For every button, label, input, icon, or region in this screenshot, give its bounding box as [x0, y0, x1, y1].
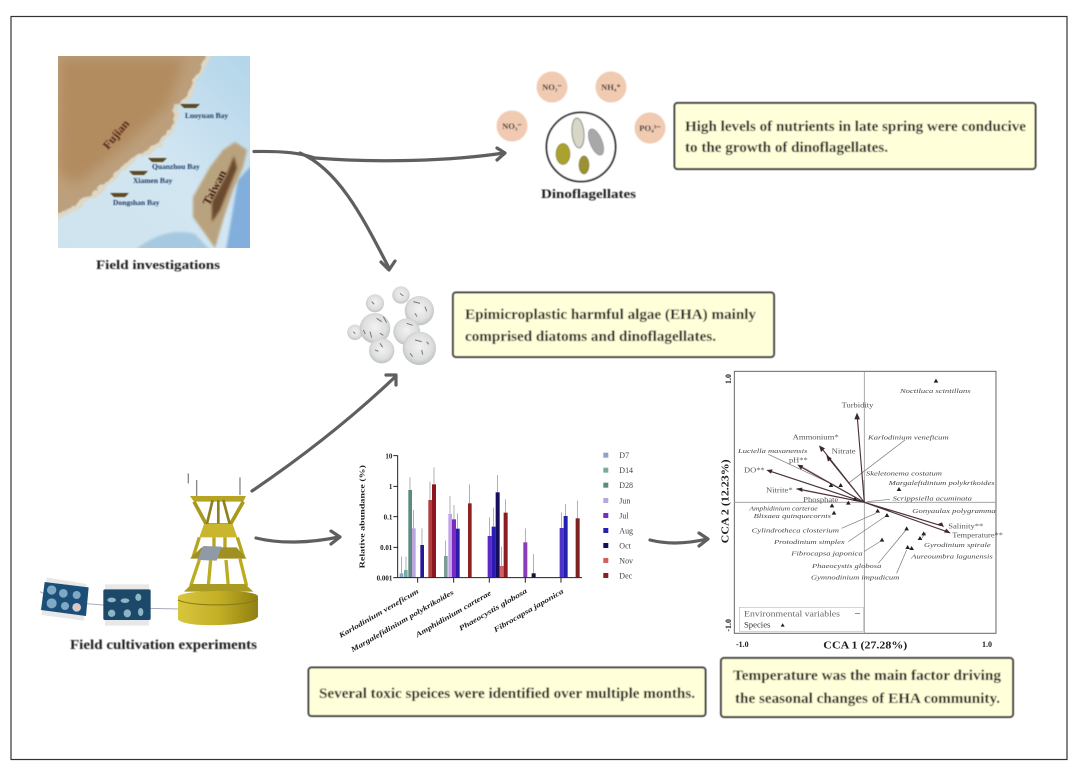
- nutrient: NO3: [496, 110, 528, 142]
- species labels: Protodinium simplex: [773, 539, 845, 546]
- environmental labels: [744, 402, 1004, 540]
- bars: [400, 484, 580, 577]
- species labels: Phaeocystis globosa: [811, 563, 882, 570]
- axis labels: CCA 2 (12.23%): [721, 459, 732, 543]
- species labels: Margalefidinium polykrikoides: [887, 480, 995, 487]
- icon: cultivation plates and buoy: [40, 473, 258, 626]
- arrow: map to microplastics: [300, 153, 395, 270]
- legend: Aug: [619, 526, 633, 535]
- axis labels: -1.0: [724, 619, 733, 632]
- legend: Jun: [619, 496, 630, 505]
- marker: Quanzhou Bay: [148, 158, 200, 171]
- panel: dinoflagellates nutrients: [496, 72, 666, 201]
- arrow: buoy to bar chart: [256, 531, 340, 544]
- species labels: Phaeocystis globosa: [457, 586, 529, 633]
- callout: nutrients: [674, 103, 1036, 169]
- legend: Jul: [619, 511, 629, 520]
- species labels: Skeletonema costatum: [866, 470, 942, 477]
- legend: [603, 451, 633, 580]
- plate one: [41, 577, 89, 621]
- y axis labels: 0.1: [384, 513, 393, 521]
- error bars: [402, 467, 577, 573]
- species labels: Fibrocapsa japonica: [492, 586, 565, 634]
- species labels: Luciella masanensis: [737, 448, 808, 455]
- species labels: Gyrodinium spirale: [924, 542, 991, 549]
- y axis labels: 0.001: [377, 574, 393, 582]
- axis labels: 1.0: [982, 640, 992, 649]
- species leader lines: [768, 440, 926, 573]
- panel: field investigations map: [50, 50, 252, 250]
- marker: Luoyuan Bay: Luoyuan Bay: [185, 111, 228, 120]
- environmental labels: DO**: [744, 467, 765, 475]
- legend: D28: [619, 481, 633, 490]
- arrow: bar chart to CCA plot: [650, 533, 708, 546]
- y axis labels: 1: [389, 483, 393, 491]
- legend: D14: [619, 466, 633, 475]
- environmental labels: Temperature**: [952, 532, 1004, 540]
- marker: Dongshan Bay: [110, 193, 160, 207]
- environmental labels: Ammonium*: [793, 434, 839, 442]
- species labels: Karlodinium veneficum: [336, 586, 420, 640]
- environmental labels: Phosphate: [803, 496, 838, 504]
- species labels: [336, 586, 565, 655]
- axis labels: CCA 1 (27.28%): [823, 640, 907, 651]
- species labels: Margalefidinium polykrikoides: [348, 588, 455, 655]
- icon: microplastic spheres: [347, 286, 436, 365]
- legend: Nov: [619, 556, 633, 565]
- heading: Dinoflagellates: Dinoflagellates: [541, 186, 636, 201]
- callout: EHA composition: comprised diatoms and dinoflagellates.: [465, 329, 716, 345]
- species labels: Karlodinium veneficum: [867, 434, 949, 441]
- marker: Quanzhou Bay: Quanzhou Bay: [152, 162, 200, 171]
- axes: [393, 455, 582, 583]
- heading: Field investigations: Field investigations: [96, 257, 220, 272]
- species labels: Noctiluca scintillans: [899, 388, 971, 395]
- y axis labels: 0.01: [380, 544, 393, 552]
- species triangles: [829, 379, 938, 550]
- arrow: buoy to microplastics: [252, 375, 396, 491]
- callout: toxic species: Several toxic speices were identified over multiple months.: [319, 686, 695, 702]
- species labels: Aureoumbra lagunensis: [910, 553, 993, 560]
- marker: Luoyuan Bay: [180, 104, 228, 120]
- bar chart: relative abundance: [336, 451, 633, 655]
- callout: temperature: the seasonal changes of EHA community.: [735, 691, 1000, 707]
- callout: nutrients: to the growth of dinoflagellates.: [685, 140, 888, 156]
- marker: Dongshan Bay: Dongshan Bay: [113, 198, 160, 207]
- callout: EHA composition: Epimicroplastic harmful algae (EHA) mainly: [465, 307, 757, 323]
- nutrient: PO4: [634, 112, 666, 144]
- plate two: [103, 584, 151, 626]
- y axis title: Relative abundance (%): [357, 464, 366, 568]
- callout: temperature: Temperature was the main factor driving: [733, 668, 1002, 684]
- nutrient: PO4: PO₄³⁻: [639, 123, 661, 133]
- nutrient: NH4: [596, 72, 626, 102]
- species labels: Scrippsiella acuminata: [893, 495, 973, 502]
- nutrient: NO2: NO₂⁻: [542, 82, 562, 92]
- environmental labels: Nitrate: [832, 448, 856, 456]
- nutrient: NO2: [536, 72, 568, 102]
- species labels: Cylindrotheca closterium: [752, 527, 839, 534]
- species labels: Fibrocapsa japonica: [790, 551, 864, 558]
- axis labels: [721, 374, 992, 651]
- callout: EHA composition: [453, 292, 774, 357]
- legend box: [739, 607, 863, 631]
- species labels: [737, 388, 996, 581]
- map label: Taiwan: Taiwan: [199, 167, 229, 207]
- environmental labels: Nitrite*: [766, 486, 793, 494]
- legend box: Environmental variables: [744, 609, 841, 619]
- map label: Fujian: Fujian: [100, 117, 132, 152]
- arrow: map to dinoflagellates: [254, 148, 505, 161]
- heading: Field cultivation experiments: Field cultivation experiments: [70, 637, 257, 652]
- y axis labels: [377, 452, 393, 582]
- callout: nutrients: High levels of nutrients in late spring were conducive: [685, 119, 1027, 135]
- callout: toxic species: [308, 668, 706, 716]
- legend: Oct: [619, 541, 632, 550]
- icon: dinoflagellate cells: [546, 112, 616, 182]
- nutrient: NH4: NH₄⁺: [601, 82, 621, 92]
- species labels: Blixaea quinquecornis: [754, 513, 831, 520]
- axis labels: -1.0: [736, 640, 749, 649]
- species labels: Gymnodinium impudicum: [811, 574, 900, 581]
- environmental labels: Turbidity: [842, 402, 874, 410]
- axis labels: 1.0: [724, 374, 733, 384]
- marker: Xiamen Bay: Xiamen Bay: [133, 176, 173, 185]
- buoy: [178, 473, 258, 625]
- environmental labels: Salinity**: [948, 522, 984, 530]
- CCA ordination plot: [721, 371, 1004, 651]
- legend box: Species: [744, 619, 771, 629]
- environment vectors: [766, 413, 951, 533]
- species labels: Gonyaulax polygramma: [912, 508, 996, 515]
- species labels: Amphidinium carterae: [413, 588, 494, 640]
- marker: Xiamen Bay: [129, 171, 173, 185]
- species labels: Amphidinium carterae: [748, 505, 818, 512]
- callout: temperature: [721, 658, 1013, 717]
- legend: D7: [619, 451, 629, 460]
- legend: Dec: [619, 571, 633, 580]
- y axis labels: 10: [385, 452, 393, 460]
- nutrient: NO3: NO₃⁻: [502, 121, 522, 131]
- environmental labels: pH**: [789, 456, 808, 464]
